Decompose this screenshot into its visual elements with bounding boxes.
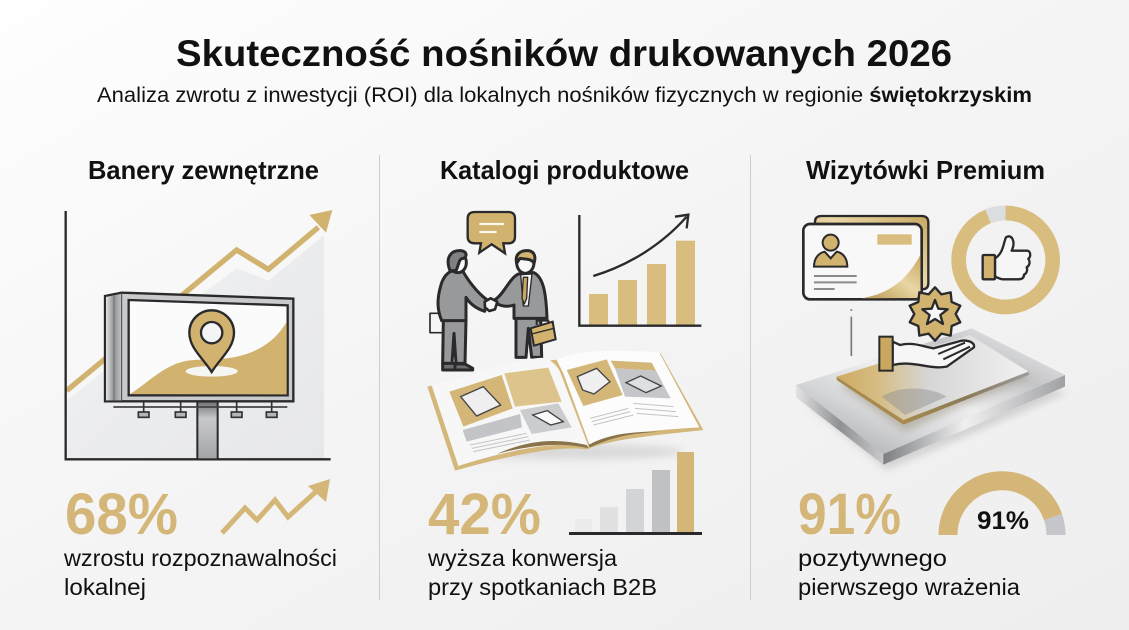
heading: katalogi: Katalogi produktowe <box>440 155 689 185</box>
icon: briefcase <box>531 321 556 346</box>
illustration: cards, rating and metal plate <box>796 213 1067 470</box>
description: katalogi: wyższa konwersja <box>427 545 617 571</box>
gauge: 91% <box>948 481 1056 535</box>
icon: speech bubble <box>468 212 515 253</box>
description: banery: wzrostu rozpoznawalności <box>63 545 337 571</box>
title: Skuteczność nośników drukowanych 2026 <box>176 33 952 74</box>
illustration: billboard with rising chart <box>66 210 332 459</box>
handshake <box>485 298 497 311</box>
metal plate <box>796 328 1067 470</box>
mini bar chart <box>569 452 702 535</box>
bar chart with rising arrow <box>579 215 701 326</box>
business cards <box>803 216 928 299</box>
description: banery: lokalnej <box>64 574 146 600</box>
stat: 68%: 68% <box>65 482 178 547</box>
panel: wizytówki premium <box>796 155 1067 600</box>
donut chart with thumbs up <box>959 213 1053 307</box>
open catalogue <box>427 351 703 471</box>
right businessman <box>495 251 547 357</box>
icon: zigzag arrow <box>222 479 330 533</box>
stat: 91%: 91% <box>798 482 901 547</box>
panel: banery zewnętrzne <box>63 155 337 600</box>
icon: hand with cuff <box>879 337 974 371</box>
subtitle: Analiza zwrotu z inwestycji (ROI) dla lokalnych nośników fizycznych w regionie świętokrzyskim <box>97 83 1032 107</box>
icon: star badge <box>910 287 960 341</box>
description: katalogi: przy spotkaniach B2B <box>428 574 657 600</box>
heading: banery: Banery zewnętrzne <box>88 155 319 185</box>
heading: wizytówki: Wizytówki Premium <box>806 155 1045 185</box>
left businessman <box>430 251 487 370</box>
gauge: 91%: 91% <box>977 507 1029 535</box>
description: wizytówki: pierwszego wrażenia <box>798 574 1020 600</box>
panel: katalogi produktowe <box>427 155 703 600</box>
stat: 42%: 42% <box>428 482 541 547</box>
illustration: handshake, chart and catalogue <box>427 212 703 471</box>
description: wizytówki: pozytywnego <box>798 545 947 571</box>
